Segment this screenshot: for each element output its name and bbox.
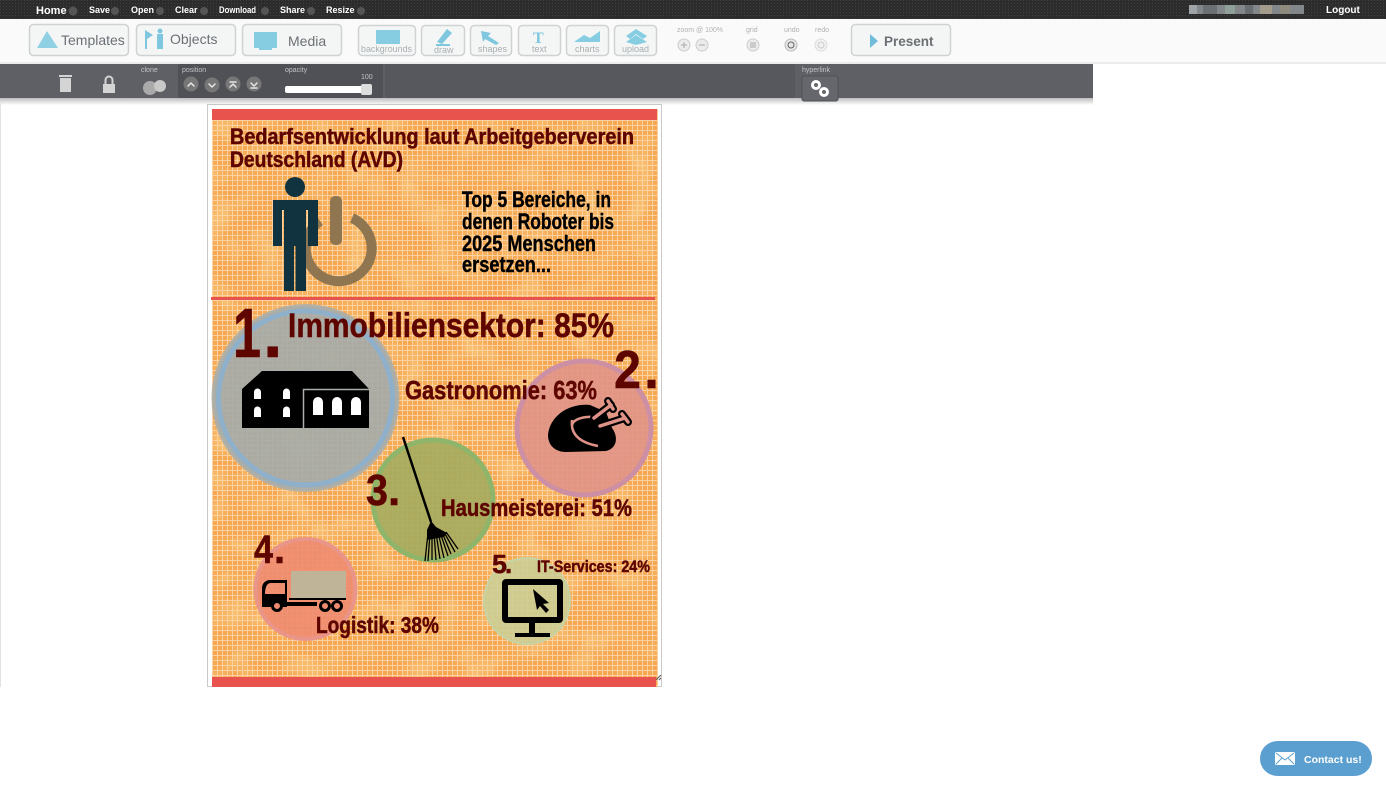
intro text: ersetzen... bbox=[462, 252, 551, 277]
media button: Media bbox=[288, 33, 326, 49]
logout link: Logout bbox=[1326, 5, 1361, 16]
intro text: 2025 Menschen bbox=[462, 231, 596, 256]
icon: rake bbox=[403, 437, 458, 561]
main toolbar bbox=[0, 19, 1386, 64]
number 1: 1 bbox=[233, 294, 261, 372]
shapes tool: shapes bbox=[478, 44, 508, 54]
hyperlink control bbox=[802, 67, 838, 101]
number 4: 4 bbox=[254, 528, 274, 572]
intro text: denen Roboter bis bbox=[462, 209, 614, 234]
title bbox=[230, 124, 634, 172]
icon: truck bbox=[262, 571, 346, 610]
grid control bbox=[746, 27, 759, 51]
charts tool: charts bbox=[575, 44, 600, 54]
top menu bar: Share bbox=[280, 5, 305, 15]
templates button bbox=[30, 24, 128, 56]
number 5: 5 bbox=[492, 549, 507, 579]
label: gastronomy: Gastronomie: 63% bbox=[405, 375, 597, 405]
text tool: T bbox=[533, 30, 544, 47]
shapes tool bbox=[470, 26, 512, 56]
hyperlink control: hyperlink bbox=[802, 67, 831, 74]
resize handle bbox=[656, 675, 661, 680]
number 3: . bbox=[388, 466, 400, 515]
intro text: Top 5 Bereiche, in bbox=[462, 187, 611, 212]
number 5: . bbox=[505, 549, 512, 579]
clone control bbox=[141, 67, 166, 95]
top menu bar: Resize bbox=[326, 5, 355, 15]
undo control: undo bbox=[784, 27, 800, 34]
title: Bedarfsentwicklung laut Arbeitgeberverein bbox=[230, 124, 634, 149]
text tool bbox=[518, 26, 560, 56]
position controls: position bbox=[182, 67, 206, 74]
redo control bbox=[815, 27, 829, 51]
number 2: 2 bbox=[614, 340, 641, 400]
item 1: real estate bbox=[214, 294, 614, 490]
draw tool: draw bbox=[434, 45, 454, 55]
present button bbox=[852, 24, 950, 56]
draw tool bbox=[422, 26, 464, 56]
label: caretaking: Hausmeisterei: 51% bbox=[441, 495, 632, 522]
number 2: . bbox=[644, 340, 659, 400]
undo control bbox=[784, 27, 800, 51]
icon: house bbox=[242, 371, 369, 428]
grid control: grid bbox=[746, 27, 758, 34]
text tool: text bbox=[532, 44, 547, 54]
bottom red band bbox=[212, 677, 656, 687]
templates button: Templates bbox=[61, 32, 125, 48]
top menu bar: Download bbox=[219, 5, 256, 15]
icon: envelope bbox=[1275, 752, 1295, 765]
number 3: 3 bbox=[366, 466, 388, 515]
charts tool bbox=[566, 26, 608, 56]
lock icon bbox=[103, 84, 115, 93]
present button: Present bbox=[884, 34, 934, 49]
divider bbox=[211, 297, 655, 300]
blurred user name bbox=[1189, 5, 1304, 14]
number 4: . bbox=[274, 528, 285, 572]
intro text bbox=[462, 187, 614, 277]
objects button: Objects bbox=[170, 31, 217, 47]
zoom controls: zoom @ 100% bbox=[677, 27, 723, 34]
number 1: . bbox=[263, 294, 282, 372]
label: real estate: Immobiliensektor: 85% bbox=[288, 307, 614, 345]
item 4: logistics bbox=[254, 528, 439, 639]
opacity slider: opacity bbox=[285, 67, 308, 74]
page frame line bbox=[0, 103, 2, 687]
top menu bar: Save bbox=[89, 5, 110, 15]
top red band bbox=[212, 109, 657, 120]
backgrounds tool bbox=[358, 26, 416, 56]
label: logistics: Logistik: 38% bbox=[316, 612, 439, 638]
top menu bar bbox=[0, 0, 1386, 19]
backgrounds tool: backgrounds bbox=[361, 44, 412, 54]
object property bar bbox=[0, 64, 1093, 105]
opacity slider bbox=[285, 67, 373, 95]
icon: person with power symbol bbox=[273, 177, 372, 291]
clone control: clone bbox=[141, 67, 158, 74]
upload tool bbox=[614, 26, 656, 56]
zoom controls bbox=[677, 27, 723, 51]
opacity slider: 100 bbox=[361, 74, 373, 81]
contact button bbox=[1260, 741, 1372, 776]
top menu bar: Clear bbox=[175, 5, 198, 15]
objects button bbox=[136, 24, 236, 56]
icon: monitor with cursor bbox=[505, 582, 560, 637]
icon: roast chicken bbox=[548, 401, 628, 452]
item 3: caretaking bbox=[366, 437, 632, 561]
media button bbox=[242, 24, 342, 56]
position controls bbox=[182, 67, 262, 92]
contact button: Contact us! bbox=[1304, 754, 1362, 766]
upload tool: upload bbox=[622, 44, 649, 54]
label: IT services: IT-Services: 24% bbox=[537, 557, 650, 576]
item 5: IT services bbox=[484, 549, 650, 644]
trash icon bbox=[59, 75, 72, 92]
title: Deutschland (AVD) bbox=[230, 147, 403, 172]
item 2: gastronomy bbox=[405, 340, 659, 495]
redo control: redo bbox=[815, 27, 829, 34]
number 2 bbox=[614, 340, 659, 400]
infographic poster bbox=[208, 104, 662, 687]
top menu bar: Home bbox=[36, 5, 67, 17]
top menu bar: Open bbox=[131, 5, 154, 15]
